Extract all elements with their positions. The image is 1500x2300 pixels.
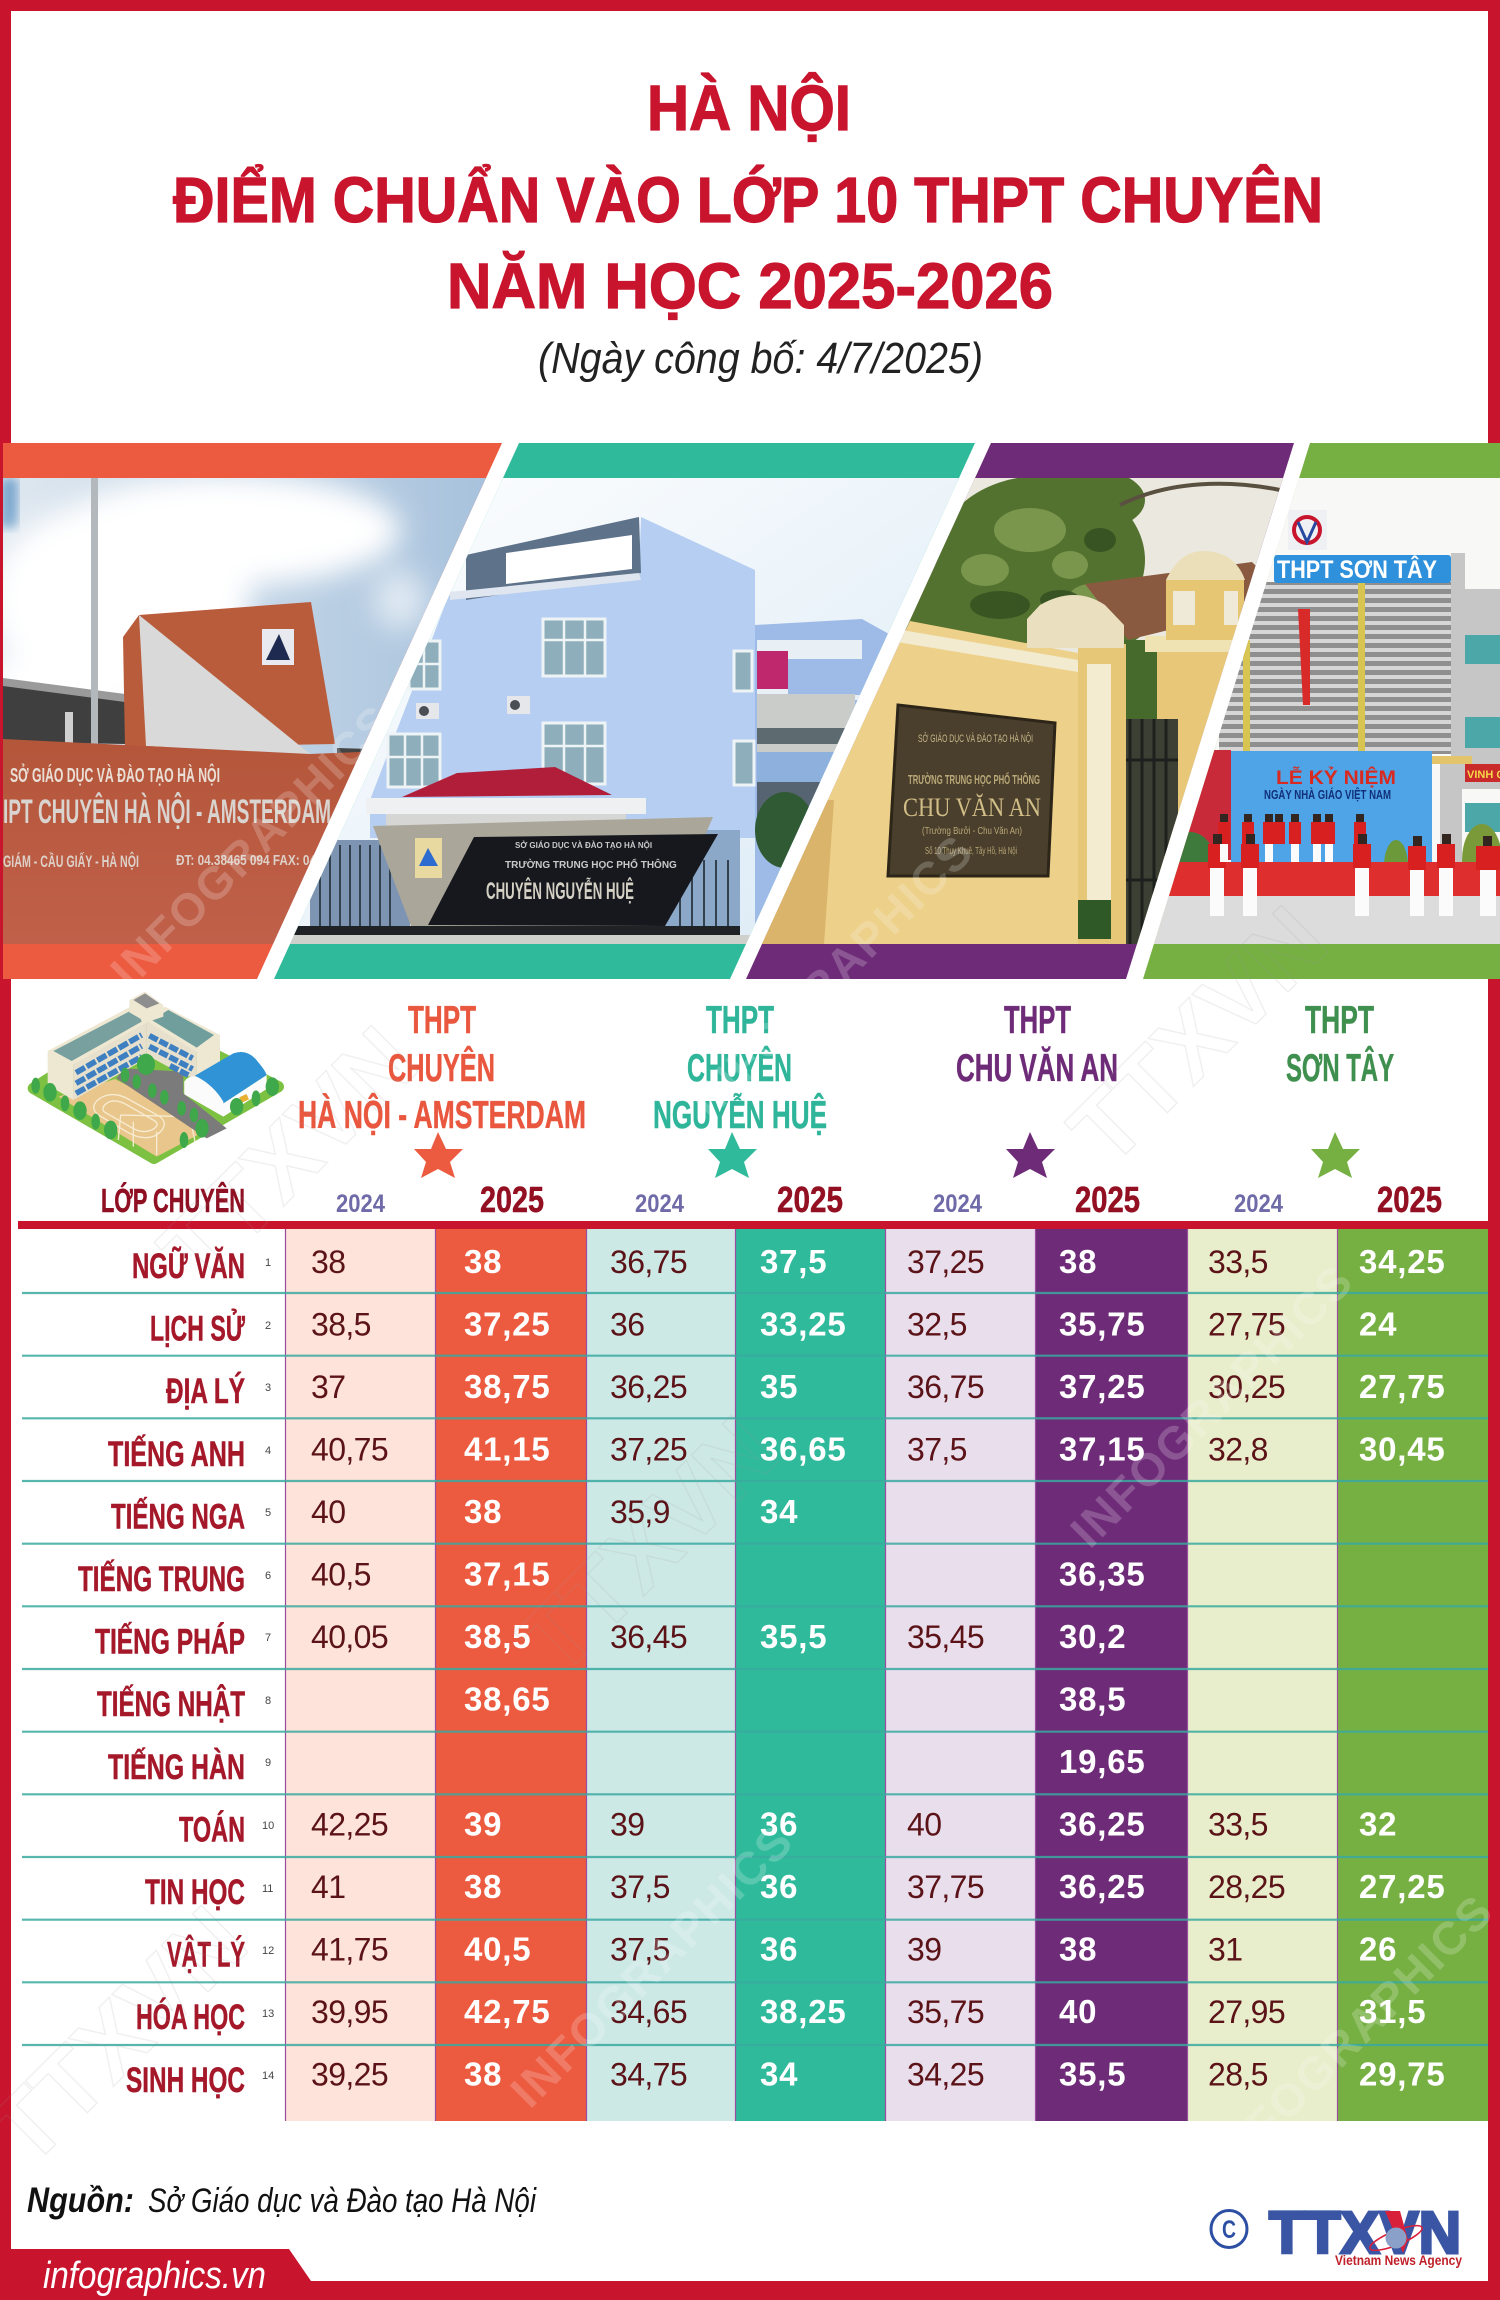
performers (1208, 814, 1500, 916)
row: Ngữ văn: 37,25 (907, 1244, 984, 1280)
photo: Hà Nội - Amsterdam school: GIÁM - CẦU GIẤY - HÀ NỘI (3, 852, 139, 871)
row: Sinh học: 34,25 (907, 2056, 984, 2092)
stage backdrop (1180, 750, 1231, 860)
watermarks: INFOGRAPHICS (500, 1814, 803, 2117)
row: Ngữ văn: 37,5 (760, 1243, 827, 1280)
watermarks: TTXVN (499, 1397, 797, 1695)
school header: Chu Văn An (956, 999, 1118, 1090)
row: Tin học: 36,25 (1059, 1868, 1146, 1905)
row: Toán: 39 (464, 1806, 502, 1842)
source note: Sở Giáo dục và Đào tạo Hà Nội (148, 2182, 537, 2220)
wing right: wall (147, 1022, 197, 1078)
row: Lịch sử: 36 (610, 1306, 644, 1342)
star: teal (708, 1132, 757, 1178)
watermarks: INFOGRAPHICS (1200, 1884, 1500, 2187)
row: Tiếng Trung (78, 1556, 1146, 1599)
watermarks: TTXVN (1049, 887, 1347, 1185)
school header: Sơn Tây: SƠN TÂY (1286, 1046, 1394, 1090)
table column backgrounds (22, 1229, 1488, 2121)
footer tab: infographics.vn (43, 2255, 266, 2297)
row: Tiếng Hàn: 19,65 (1059, 1743, 1146, 1780)
row: Vật lý: 12 (262, 1945, 274, 1957)
row: Toán: 32 (1359, 1806, 1397, 1842)
row: Lịch sử: 32,5 (907, 1306, 967, 1342)
watermarks (0, 694, 1500, 2187)
row: Ngữ văn: 38 (311, 1244, 345, 1280)
row: Vật lý: 39 (907, 1932, 941, 1968)
windows (388, 619, 754, 787)
watermarks: INFOGRAPHICS (1060, 1254, 1363, 1557)
row: Địa lý: 37,25 (1059, 1368, 1146, 1405)
year headings (336, 1179, 1442, 1220)
row: Tiếng Anh: 37,15 (1059, 1430, 1146, 1468)
year headings: 2025 (480, 1179, 544, 1220)
band: green panel (1143, 443, 1500, 979)
row: Địa lý: 37 (311, 1369, 345, 1405)
row: Tiếng Nga: 5 (265, 1507, 271, 1519)
row: Địa lý: 27,75 (1359, 1368, 1446, 1405)
row: Tiếng Nga: 34 (760, 1493, 798, 1530)
row: Tin học: 41 (311, 1869, 345, 1905)
row: Tiếng Anh: 32,8 (1208, 1432, 1268, 1468)
source note (27, 2181, 537, 2220)
row: Tiếng Anh: 4 (265, 1445, 271, 1457)
row: Hóa học: 39,95 (311, 1994, 388, 2030)
row: Địa lý: ĐỊA LÝ (166, 1371, 245, 1411)
row: Tiếng Nga: 40 (311, 1494, 345, 1530)
row: Tiếng Pháp: TIẾNG PHÁP (95, 1622, 245, 1662)
year headings: 2024 (635, 1190, 684, 1218)
row: Ngữ văn: NGỮ VĂN (132, 1246, 245, 1286)
row: Vật lý: 31 (1208, 1932, 1242, 1968)
building illustration (31, 992, 279, 1158)
row: Vật lý (167, 1930, 1397, 1975)
school header: Sơn Tây (1286, 999, 1394, 1090)
running court (58, 1079, 204, 1157)
canopy and red roof (402, 767, 612, 797)
school header: Hà Nội - Amsterdam: HÀ NỘI - AMSTERDAM (298, 1092, 586, 1137)
row: Tin học (145, 1868, 1446, 1912)
row: Vật lý: 37,5 (610, 1932, 670, 1968)
row: Sinh học: SINH HỌC (126, 2061, 245, 2100)
photo: Chu Văn An school: Số 10 Thụy Khuê, Tây Hồ, Hà Nội (925, 845, 1017, 857)
photo: Hà Nội - Amsterdam school: IPT CHUYÊN HÀ NỘI - AMSTERDAM (3, 792, 331, 831)
row: Hóa học (136, 1993, 1426, 2037)
row: Sinh học: 39,25 (311, 2056, 388, 2092)
photo: Sơn Tây school: LỄ KỶ NIỆM (1276, 767, 1396, 789)
row: Địa lý: 36,75 (907, 1369, 984, 1405)
row: Toán: 33,5 (1208, 1806, 1268, 1842)
year headings: 2024 (336, 1190, 385, 1218)
row: Địa lý: 30,25 (1208, 1369, 1285, 1405)
row: Tiếng Pháp: 35,5 (760, 1618, 827, 1655)
photo: Chuyên Nguyễn Huệ school: TRƯỜNG TRUNG HỌC PHỔ THÔNG (505, 858, 677, 871)
row: Sinh học: 35,5 (1059, 2056, 1126, 2092)
row: Tiếng Nhật: 38,65 (464, 1680, 551, 1718)
row: Vật lý: 36 (760, 1930, 798, 1968)
photo: Hà Nội - Amsterdam school: ĐT: 04.38465 094 FAX: 04 (176, 852, 317, 869)
row: Tiếng Trung: 6 (265, 1570, 271, 1582)
lawn base (33, 1018, 278, 1158)
school header: Nguyễn Huệ: CHUYÊN (687, 1046, 792, 1090)
row: Toán (179, 1806, 1397, 1849)
row: Lịch sử: 38,5 (311, 1306, 371, 1342)
row: Vật lý: 38 (1059, 1930, 1097, 1968)
row: Hóa học: HÓA HỌC (136, 1997, 245, 2037)
photo: Chuyên Nguyễn Huệ school: SỞ GIÁO DỤC VÀ ĐÀO TẠO HÀ NỘI (515, 841, 652, 850)
title (173, 71, 1323, 322)
row: Tiếng Pháp: 38,5 (464, 1618, 531, 1655)
photo: Hà Nội - Amsterdam school: SỞ GIÁO DỤC VÀ ĐÀO TẠO HÀ NỘI (10, 763, 220, 787)
row: Tiếng Pháp: 30,2 (1059, 1618, 1126, 1655)
row: Toán: 40 (907, 1806, 941, 1842)
row: Tin học: 38 (464, 1868, 502, 1905)
row: Tiếng Trung: 37,15 (464, 1556, 551, 1592)
row: Sinh học: 28,5 (1208, 2056, 1268, 2092)
row: Tin học: 28,25 (1208, 1869, 1285, 1905)
photo: Chu Văn An school: TRƯỜNG TRUNG HỌC PHỔ THÔNG (908, 772, 1040, 787)
row: Toán: 36,25 (1059, 1806, 1146, 1842)
row: Tiếng Anh: 36,65 (760, 1430, 847, 1468)
school header: Nguyễn Huệ (653, 999, 827, 1137)
row: Vật lý: 26 (1359, 1930, 1397, 1968)
school header: Sơn Tây: THPT (1305, 999, 1374, 1042)
row: Tin học: 37,5 (610, 1869, 670, 1905)
row: Hóa học: 35,75 (907, 1994, 984, 2030)
main block (370, 517, 755, 838)
gate pillar (1078, 644, 1126, 944)
photo: Sơn Tây school (1140, 478, 1500, 948)
wing right: roof (147, 1007, 220, 1052)
logo: TTXVN: C (1222, 2216, 1236, 2244)
central tower (129, 992, 163, 1022)
row: Tiếng Nhật: TIẾNG NHẬT (97, 1684, 245, 1724)
row: Ngữ văn: 33,5 (1208, 1244, 1268, 1280)
row: Tiếng Pháp: 35,45 (907, 1619, 984, 1655)
year headings: 2024 (933, 1190, 982, 1218)
source note: Nguồn: (27, 2181, 134, 2220)
row: Sinh học: 29,75 (1359, 2056, 1446, 2092)
row: Ngữ văn: 38 (1059, 1243, 1097, 1280)
star: green (1311, 1132, 1360, 1178)
title: HÀ NỘI (647, 71, 851, 144)
row: Lịch sử: 33,25 (760, 1306, 847, 1342)
row: Tiếng Anh: 37,5 (907, 1432, 967, 1468)
year headings: 2025 (1377, 1179, 1442, 1220)
school header: Hà Nội - Amsterdam: THPT (408, 999, 476, 1042)
column heading: specialised class: LỚP CHUYÊN (101, 1182, 245, 1219)
logo: TTXVN: TTXVN (1269, 2200, 1461, 2266)
watermarks: INFOGRAPHICS (100, 694, 403, 997)
row: Hóa học: 34,65 (610, 1994, 687, 2030)
band: purple panel (746, 443, 1294, 979)
photo: Chuyên Nguyễn Huệ school (280, 478, 980, 948)
row: Tiếng Pháp (95, 1618, 1126, 1662)
row: Ngữ văn: 38 (464, 1243, 502, 1280)
photo: Chuyên Nguyễn Huệ school: CHUYÊN NGUYỄN HUỆ (486, 876, 634, 905)
wing left: long wall (73, 1022, 147, 1100)
fence (310, 840, 410, 930)
row: Tiếng Anh: 41,15 (464, 1430, 551, 1468)
row: Hóa học: 13 (262, 2008, 274, 2020)
photo: Sơn Tây school: THPT SƠN TÂY (1277, 554, 1437, 584)
row: Lịch sử: 27,75 (1208, 1306, 1285, 1342)
row: Sinh học: 38 (464, 2056, 502, 2092)
photo: Chu Văn An school (750, 470, 1300, 948)
photo: Chu Văn An school: (Trường Bưởi - Chu Văn An) (922, 825, 1022, 837)
row: Tiếng Pháp: 7 (265, 1632, 271, 1644)
row: Tiếng Anh: TIẾNG ANH (108, 1434, 245, 1474)
row: Địa lý: 38,75 (464, 1368, 551, 1405)
row: Tiếng Nhật: 8 (265, 1695, 271, 1707)
row: Lịch sử: LỊCH SỬ (150, 1309, 246, 1349)
row: Hóa học: 42,75 (464, 1993, 551, 2030)
row: Lịch sử (150, 1306, 1397, 1349)
star: orange (414, 1132, 463, 1178)
row: Tiếng Anh: 30,45 (1359, 1430, 1446, 1468)
title: ĐIỂM CHUẨN VÀO LỚP 10 THPT CHUYÊN (173, 163, 1323, 236)
row: Tin học: 11 (262, 1883, 273, 1895)
row: Tiếng Nhật (97, 1680, 1126, 1724)
row: Tiếng Pháp: 36,45 (610, 1619, 687, 1655)
row: Tin học: 27,25 (1359, 1868, 1446, 1905)
row: Sinh học: 34,75 (610, 2056, 687, 2092)
row: Tin học: 37,75 (907, 1869, 984, 1905)
photo: Chu Văn An school: SỞ GIÁO DỤC VÀ ĐÀO TẠO HÀ NỘI (918, 732, 1033, 745)
band: teal panel (274, 443, 975, 979)
row: Toán: 39 (610, 1806, 644, 1842)
row: Tiếng Hàn: 9 (265, 1757, 271, 1769)
photo: Sơn Tây school: NGÀY NHÀ GIÁO VIỆT NAM (1264, 787, 1391, 802)
row: Tiếng Nga (111, 1493, 798, 1536)
school header: Hà Nội - Amsterdam: CHUYÊN (388, 1046, 495, 1090)
wing left: roof (48, 1003, 148, 1064)
watermarks: INFOGRAPHICS (680, 824, 983, 1127)
row: Tiếng Trung: 36,35 (1059, 1556, 1146, 1592)
row: Địa lý: 3 (265, 1382, 271, 1394)
footer tab (0, 2249, 311, 2300)
row: Sinh học (126, 2056, 1446, 2100)
row: Hóa học: 40 (1059, 1993, 1097, 2030)
row: Sinh học: 34 (760, 2056, 798, 2092)
row: Toán: TOÁN (179, 1809, 245, 1849)
row: Vật lý: 41,75 (311, 1932, 388, 1968)
row: Tin học: TIN HỌC (145, 1873, 245, 1912)
row: Lịch sử: 24 (1359, 1306, 1397, 1342)
row: Ngữ văn (132, 1243, 1446, 1286)
row: Toán: 36 (760, 1806, 798, 1842)
row: Ngữ văn: 36,75 (610, 1244, 687, 1280)
row: Hóa học: 27,95 (1208, 1994, 1285, 2030)
row: Tiếng Hàn: TIẾNG HÀN (108, 1747, 245, 1787)
row: Địa lý: 36,25 (610, 1369, 687, 1405)
row: Tiếng Nga: 38 (464, 1493, 502, 1530)
photo banner (0, 443, 1500, 979)
row: Tiếng Anh: 40,75 (311, 1432, 388, 1468)
school header: Hà Nội - Amsterdam (298, 999, 586, 1137)
row: Tiếng Anh: 37,25 (610, 1432, 687, 1468)
school header: Nguyễn Huệ: THPT (706, 999, 774, 1042)
school header: Chu Văn An: CHU VĂN AN (956, 1046, 1118, 1090)
title: NĂM HỌC 2025-2026 (447, 250, 1053, 322)
photo: Hà Nội - Amsterdam school (0, 475, 500, 948)
row: Vật lý: VẬT LÝ (167, 1935, 245, 1975)
row: Tiếng Nga: TIẾNG NGA (111, 1496, 245, 1536)
year headings: 2024 (1234, 1190, 1283, 1218)
row: Vật lý: 40,5 (464, 1930, 531, 1968)
logo: TTXVN: Vietnam News Agency (1335, 2252, 1462, 2268)
row: Ngữ văn: 1 (265, 1257, 271, 1269)
row: Hóa học: 38,25 (760, 1993, 847, 2030)
row: Địa lý: 35 (760, 1368, 798, 1405)
row: Địa lý (166, 1368, 1446, 1411)
row: Tiếng Nga: 35,9 (610, 1494, 670, 1530)
right tower (1157, 652, 1228, 880)
row: Lịch sử: 2 (265, 1320, 271, 1332)
row: Sinh học: 14 (262, 2070, 274, 2082)
road (117, 1068, 227, 1138)
band: orange panel (3, 443, 502, 979)
row: Lịch sử: 37,25 (464, 1306, 551, 1342)
year headings: 2025 (1075, 1179, 1140, 1220)
school header: Nguyễn Huệ: NGUYỄN HUỆ (653, 1093, 827, 1137)
subtitle: publication date: (Ngày công bố: 4/7/2025) (538, 334, 983, 383)
row: Toán: 42,25 (311, 1806, 388, 1842)
row: Tiếng Nhật: 38,5 (1059, 1680, 1126, 1718)
wall (760, 621, 1078, 944)
row: Tiếng Anh (108, 1430, 1446, 1474)
row: Hóa học: 31,5 (1359, 1993, 1426, 2030)
shrub behind gate (1124, 640, 1157, 719)
photo: Chu Văn An school: CHU VĂN AN (903, 793, 1041, 822)
wing left: end wall (48, 1051, 73, 1100)
watermarks: TTXVN (139, 1007, 437, 1305)
row: Tiếng Hàn (108, 1743, 1146, 1787)
gym (184, 1075, 267, 1117)
row: Tiếng Trung: TIẾNG TRUNG (78, 1559, 245, 1599)
second building (755, 619, 889, 944)
table top rule (18, 1221, 1488, 1229)
row: Tiếng Trung: 40,5 (311, 1556, 371, 1592)
school header: Chu Văn An: THPT (1004, 999, 1071, 1042)
row: Tin học: 36 (760, 1868, 798, 1905)
row: Lịch sử: 35,75 (1059, 1306, 1146, 1342)
year headings: 2025 (777, 1179, 843, 1220)
gate (1126, 719, 1178, 944)
trees (31, 1054, 279, 1148)
plaque (888, 705, 1055, 876)
row: Toán: 10 (262, 1820, 274, 1832)
star: purple (1006, 1132, 1055, 1178)
row: Ngữ văn: 34,25 (1359, 1243, 1446, 1280)
row: Tiếng Pháp: 40,05 (311, 1619, 388, 1655)
